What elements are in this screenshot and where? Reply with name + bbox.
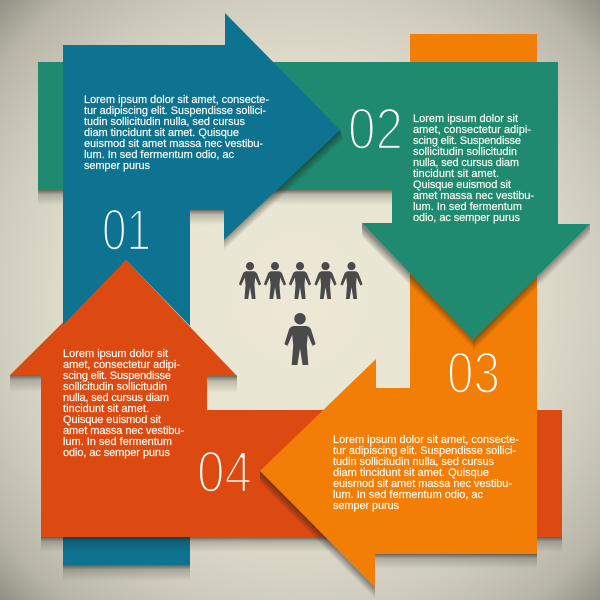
icon: person 4 bbox=[314, 262, 337, 299]
blue arrow text: tur adipiscing elit. Suspendisse sollici- bbox=[84, 105, 266, 117]
green arrow text: Quisque euismod sit bbox=[413, 179, 511, 191]
orange arrow text: semper purus bbox=[333, 500, 400, 512]
blue arrow shape bbox=[63, 13, 340, 326]
orange arrow text: lum. In sed fermentum odio, ac bbox=[333, 489, 484, 501]
green arrow text: tincidunt sit amet. bbox=[413, 168, 499, 180]
red arrow text: Lorem ipsum dolor sit bbox=[63, 348, 168, 360]
green arrow 02 bbox=[38, 62, 590, 352]
number 03: 03 bbox=[447, 341, 500, 406]
red arrow text: scing elit. Suspendisse bbox=[63, 370, 171, 382]
orange arrow text: tur adipiscing elit. Suspendisse sollici- bbox=[333, 445, 516, 457]
people icons bbox=[239, 262, 363, 365]
orange arrow shape bbox=[260, 34, 537, 587]
red arrow text: nulla, sed cursus diam bbox=[63, 392, 169, 404]
green arrow text: Lorem ipsum dolor sit bbox=[413, 113, 518, 125]
blue arrow text: Lorem ipsum dolor sit amet, consecte- bbox=[84, 94, 269, 106]
green arrow shape bbox=[38, 62, 590, 340]
blue arrow tail bbox=[63, 530, 190, 581]
red arrow text: amet, consectetur adipi- bbox=[63, 359, 180, 371]
blue arrow text: diam tincidunt sit amet. Quisque bbox=[84, 127, 239, 139]
red arrow text: lum. In sed fermentum bbox=[63, 436, 172, 448]
icon: person 1 bbox=[239, 262, 261, 299]
green arrow text: scing elit. Suspendisse bbox=[413, 135, 521, 147]
red arrow text: amet massa nec vestibu- bbox=[63, 425, 184, 437]
orange arrow text: tudin sollicitudin nulla, sed cursus bbox=[333, 456, 494, 468]
number 02: 02 bbox=[348, 97, 403, 162]
red arrow text: odio, ac semper purus bbox=[63, 447, 170, 459]
blue arrow 01 bbox=[63, 13, 343, 326]
orange arrow text: Lorem ipsum dolor sit amet, consecte- bbox=[333, 434, 519, 446]
number 01: 01 bbox=[102, 198, 151, 263]
red arrow text: sollicitudin sollicitudin bbox=[63, 381, 167, 393]
blue arrow text: semper purus bbox=[84, 160, 150, 172]
icon: person 2 bbox=[264, 262, 286, 299]
red arrow text: Quisque euismod sit bbox=[63, 414, 161, 426]
icon: person 5 bbox=[340, 262, 363, 299]
green arrow text: amet massa nec vestibu- bbox=[413, 190, 534, 202]
number 04: 04 bbox=[197, 440, 252, 505]
green arrow text: lum. In sed fermentum bbox=[413, 201, 522, 213]
red arrow shape bbox=[10, 260, 562, 537]
green arrow text: odio, ac semper purus bbox=[413, 212, 520, 224]
green arrow text: sollicitudin sollicitudin bbox=[413, 146, 517, 158]
green arrow text: nulla, sed cursus diam bbox=[413, 157, 519, 169]
orange arrow text: diam tincidunt sit amet. Quisque bbox=[333, 467, 489, 479]
orange arrow text: euismod sit amet massa nec vestibu- bbox=[333, 478, 512, 490]
red arrow text: tincidunt sit amet. bbox=[63, 403, 149, 415]
green arrow text: amet, consectetur adipi- bbox=[413, 124, 531, 136]
icon: leader person bbox=[284, 313, 316, 365]
red arrow 04 bbox=[10, 260, 562, 552]
blue arrow text: lum. In sed fermentum odio, ac bbox=[84, 149, 234, 161]
blue arrow text: euismod sit amet massa nec vestibu- bbox=[84, 138, 263, 150]
orange arrow 03 bbox=[260, 34, 537, 600]
icon: person 3 bbox=[289, 262, 311, 299]
blue arrow text: tudin sollicitudin nulla, sed cursus bbox=[84, 116, 246, 128]
